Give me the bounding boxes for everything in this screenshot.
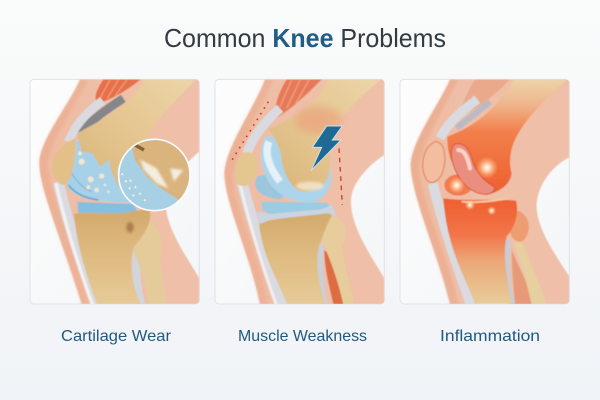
panel: cartilage wear: [30, 79, 199, 307]
panel: inflammation: [400, 79, 569, 307]
weakness dashes: [231, 102, 342, 205]
title: Common Knee Problems: [164, 23, 446, 53]
tibia: [74, 209, 150, 304]
tibial cartilage: [77, 202, 137, 213]
femur: [77, 79, 195, 188]
blue femoral cartilage: [67, 140, 133, 203]
patella: [51, 138, 75, 185]
dark recess: [80, 98, 123, 133]
label: muscle weakness: Muscle Weakness: [238, 328, 367, 345]
fibula: [513, 240, 547, 304]
label: inflammation: Inflammation: [440, 328, 540, 345]
calf muscle: [324, 250, 343, 304]
calf: [512, 250, 532, 304]
tibial cartilage: [262, 202, 332, 214]
inflamed lower synovium: [444, 174, 472, 196]
tendon: [58, 101, 142, 307]
femur: [268, 79, 380, 192]
magnifier: [119, 138, 192, 211]
fibula: [133, 220, 167, 304]
lightning bolt: [311, 126, 342, 171]
tendon: [433, 99, 513, 307]
panel: muscle weakness: [215, 79, 384, 307]
cartilage wear flecks: [78, 151, 110, 193]
swollen bursa: [451, 144, 495, 194]
tendon: [242, 108, 324, 307]
muscle: [463, 80, 510, 112]
muscle: [95, 79, 141, 103]
femoral cartilage: [261, 137, 331, 203]
fibula: [322, 217, 354, 304]
redness above condyle: [295, 106, 342, 134]
muscle: [275, 79, 322, 118]
tibia: [259, 212, 333, 304]
rear cartilage: [255, 173, 288, 199]
tibia: [443, 198, 517, 304]
femur: [447, 79, 567, 195]
label: cartilage wear: Cartilage Wear: [61, 328, 172, 345]
hot spots: [476, 158, 498, 178]
patella: [235, 152, 257, 186]
patella: [423, 142, 445, 182]
